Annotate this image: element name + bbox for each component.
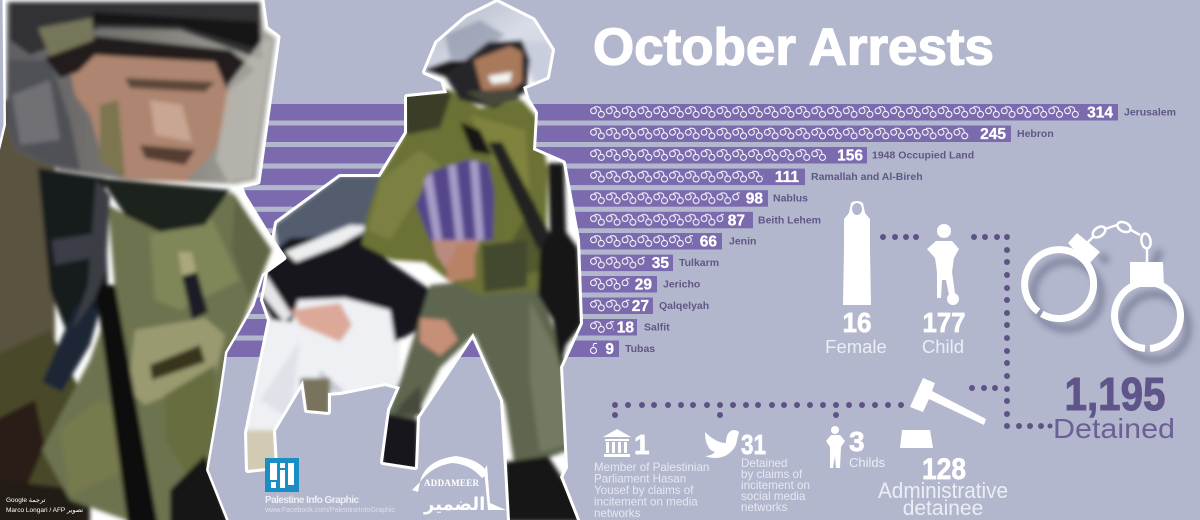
silhouette outline xyxy=(247,2,580,520)
buckle xyxy=(182,272,208,320)
tactical vest xyxy=(42,192,272,520)
helmet xyxy=(426,2,552,80)
bar: Tulkarm: Tulkarm xyxy=(679,257,719,269)
bar: Tulkarm xyxy=(220,255,719,272)
stat: social media detainees: 31 xyxy=(741,429,766,460)
rifle xyxy=(538,163,582,368)
icon: female figure xyxy=(843,201,871,305)
bar: Jenin: Jenin xyxy=(729,236,756,248)
bar: Hebron xyxy=(220,126,1054,143)
icon: Palestine Info Graphic logo: www.Facebook.com/PalestineInfoGraphic xyxy=(264,505,395,514)
bar: Jericho xyxy=(220,276,700,294)
stat: social media detainees: by claims of xyxy=(741,468,803,481)
helmet band xyxy=(10,2,262,60)
detainee shoes xyxy=(247,428,274,470)
soldier hand xyxy=(446,242,475,282)
stat: administrative detainee: Administrative xyxy=(878,478,1008,503)
strap and radio xyxy=(488,142,552,250)
icon: Addameer logo: الضمير xyxy=(423,494,485,515)
bar: Qalqelyah: Qalqelyah xyxy=(659,300,709,312)
icon: Addameer logo: ADDAMEER xyxy=(424,478,480,488)
bar: Beith Lehem: 87 xyxy=(728,212,745,229)
detainee white trousers xyxy=(248,294,404,462)
stat: social media detainees xyxy=(741,429,810,514)
photo credit xyxy=(6,497,83,514)
bar: Ramallah and Al-Bireh xyxy=(220,169,923,186)
stat: administrative detainee xyxy=(878,453,1008,520)
soldier trousers xyxy=(386,275,570,470)
bar: Tubas xyxy=(220,340,655,358)
stat: Female: Female xyxy=(825,336,887,357)
bar: Jenin: 66 xyxy=(700,234,717,250)
stat: member of parliament xyxy=(594,429,709,520)
bar: Jerusalem xyxy=(220,104,1176,122)
left sleeve xyxy=(0,97,60,357)
stat: Female xyxy=(825,307,887,357)
bar: Beith Lehem: Beith Lehem xyxy=(758,214,821,226)
title: October Arrests xyxy=(593,18,994,76)
detainee hands xyxy=(291,303,352,342)
radio xyxy=(42,305,100,392)
photo credit: Marco Longari / AFP تصوير xyxy=(6,507,83,514)
stat: children: Childs xyxy=(849,455,886,470)
icon: handcuffs xyxy=(1025,220,1188,360)
icon: small child figure xyxy=(826,426,845,468)
stat: member of parliament: Parliament Hasan xyxy=(594,472,686,486)
bar: Tubas: 9 xyxy=(605,341,614,358)
visor right reflection xyxy=(216,40,272,182)
bar: Jerusalem: 314 xyxy=(1087,104,1113,122)
icon: gavel xyxy=(900,378,986,448)
bar: Ramallah and Al-Bireh: Ramallah and Al-Bireh xyxy=(811,171,923,183)
icon: Palestine Info Graphic logo: Palestine Info Graphic xyxy=(265,495,359,506)
photo: close-up of soldier with visor xyxy=(0,0,284,520)
stat: total detained: Detained xyxy=(1053,413,1175,444)
bar: Tubas: Tubas xyxy=(625,343,655,355)
bar: Ramallah and Al-Bireh: 111 xyxy=(775,169,799,186)
icon: parliament building xyxy=(603,429,631,457)
bar: Salfit: Salfit xyxy=(644,322,670,334)
bar: Nablus xyxy=(220,190,808,208)
neck xyxy=(100,178,230,232)
stat: Child: 177 xyxy=(922,307,966,338)
bar: Jericho: Jericho xyxy=(663,278,700,290)
bar: Salfit xyxy=(220,319,670,336)
stat: Child: Child xyxy=(922,336,964,357)
dotted connectors xyxy=(612,234,1052,429)
stat: administrative detainee: detainee xyxy=(903,497,983,520)
rifle bottom xyxy=(170,455,230,520)
soldier jacket xyxy=(362,90,548,295)
stat: children xyxy=(849,426,886,470)
stat: administrative detainee: 128 xyxy=(922,453,966,486)
bar: Qalqelyah: 27 xyxy=(632,298,649,315)
stat: member of parliament: 1 xyxy=(634,429,650,460)
striped hat over detainee's face xyxy=(416,160,494,240)
soldier boots xyxy=(383,412,417,467)
stat: Child xyxy=(922,307,966,357)
bar: Nablus: Nablus xyxy=(773,193,808,205)
bar: Hebron: 245 xyxy=(980,126,1006,143)
bar: 1948 Occupied Land: 1948 Occupied Land xyxy=(872,150,974,162)
stat: member of parliament: Member of Palestinian xyxy=(594,461,709,474)
stat: social media detainees: Detained xyxy=(741,457,787,470)
hair xyxy=(45,35,255,92)
stat: total detained xyxy=(1053,368,1175,444)
stat: social media detainees: networks xyxy=(741,501,788,514)
bar: Beith Lehem xyxy=(220,212,821,229)
stat: Female: 16 xyxy=(842,307,872,338)
bar: 1948 Occupied Land: 156 xyxy=(837,148,863,164)
back strap xyxy=(38,168,108,340)
stat: member of parliament: incitement on media xyxy=(594,496,698,508)
bar: Qalqelyah xyxy=(220,298,709,315)
stat: children: 3 xyxy=(849,426,865,457)
stat: total detained: 1,195 xyxy=(1064,368,1166,420)
bar: Salfit: 18 xyxy=(617,320,634,336)
bar: Jenin xyxy=(220,233,756,250)
icon: child figure xyxy=(927,224,959,305)
photo: soldier and detainee running xyxy=(240,0,582,520)
bar: Nablus: 98 xyxy=(746,191,763,208)
bar chart: arrests by governorate xyxy=(220,104,1176,358)
silhouette outline xyxy=(0,0,284,520)
face xyxy=(70,48,232,182)
bar: Tulkarm: 35 xyxy=(652,255,669,272)
bar: Hebron: Hebron xyxy=(1017,128,1054,140)
detainee backpack and jacket xyxy=(274,174,382,249)
black diagonal strap xyxy=(95,285,158,520)
photo credit: Google ترجمة xyxy=(6,497,46,504)
bar: Jericho: 29 xyxy=(635,276,652,294)
visor base xyxy=(6,2,276,184)
icon: Addameer logo xyxy=(412,456,506,515)
bar: 1948 Occupied Land xyxy=(220,147,974,164)
bar: Jerusalem: Jerusalem xyxy=(1124,106,1176,118)
stat: member of parliament: networks xyxy=(594,507,641,520)
stat: social media detainees: incitement on xyxy=(741,479,810,492)
soldier face xyxy=(474,46,522,94)
stat: member of parliament: Yousef by claims of xyxy=(594,484,694,497)
stat: social media detainees: social media xyxy=(741,490,806,503)
icon: Palestine Info Graphic logo xyxy=(264,458,395,514)
icon: twitter bird xyxy=(705,430,739,458)
